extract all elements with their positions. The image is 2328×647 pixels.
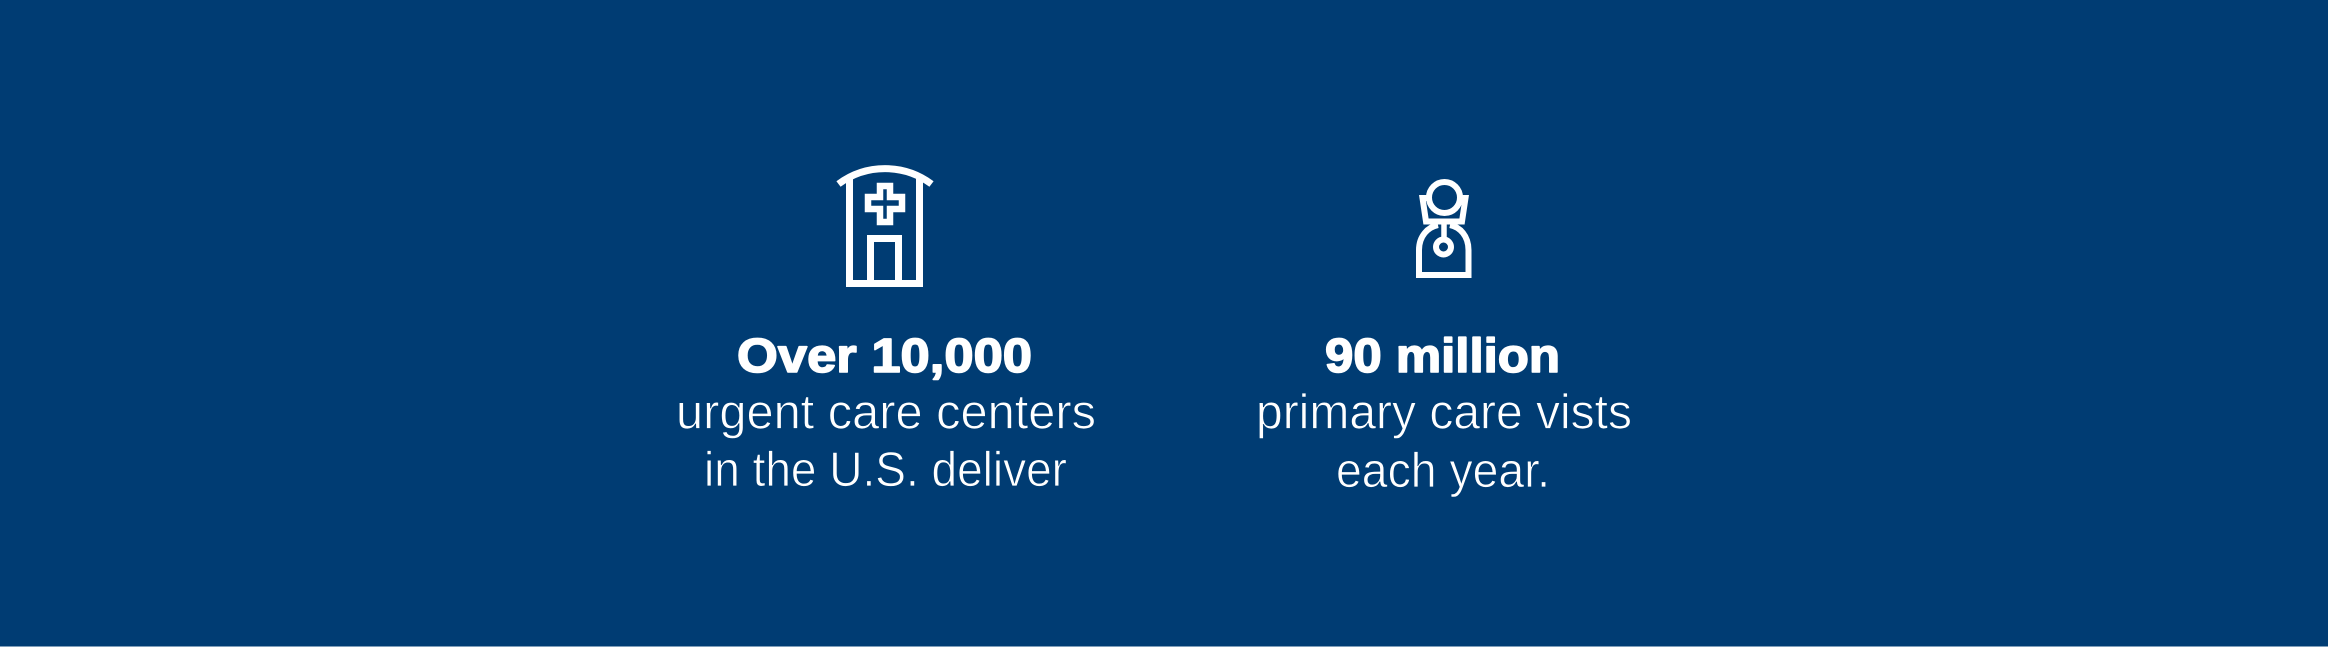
- icon: doctor with stethoscope: [1419, 182, 1468, 275]
- text: in the U.S. deliver: in the U.S. deliver: [704, 443, 1067, 497]
- icon: hospital building: [838, 169, 932, 284]
- stat heading: 90 million: 90 million: [1325, 330, 1560, 383]
- text: each year.: each year.: [1336, 444, 1550, 498]
- panel: primary care visits statistic: [1256, 182, 1632, 498]
- text: urgent care centers: urgent care centers: [676, 386, 1096, 440]
- text: primary care vists: primary care vists: [1256, 386, 1632, 440]
- panel: urgent care centers statistic: [676, 169, 1096, 497]
- stat heading: Over 10,000: Over 10,000: [737, 330, 1032, 383]
